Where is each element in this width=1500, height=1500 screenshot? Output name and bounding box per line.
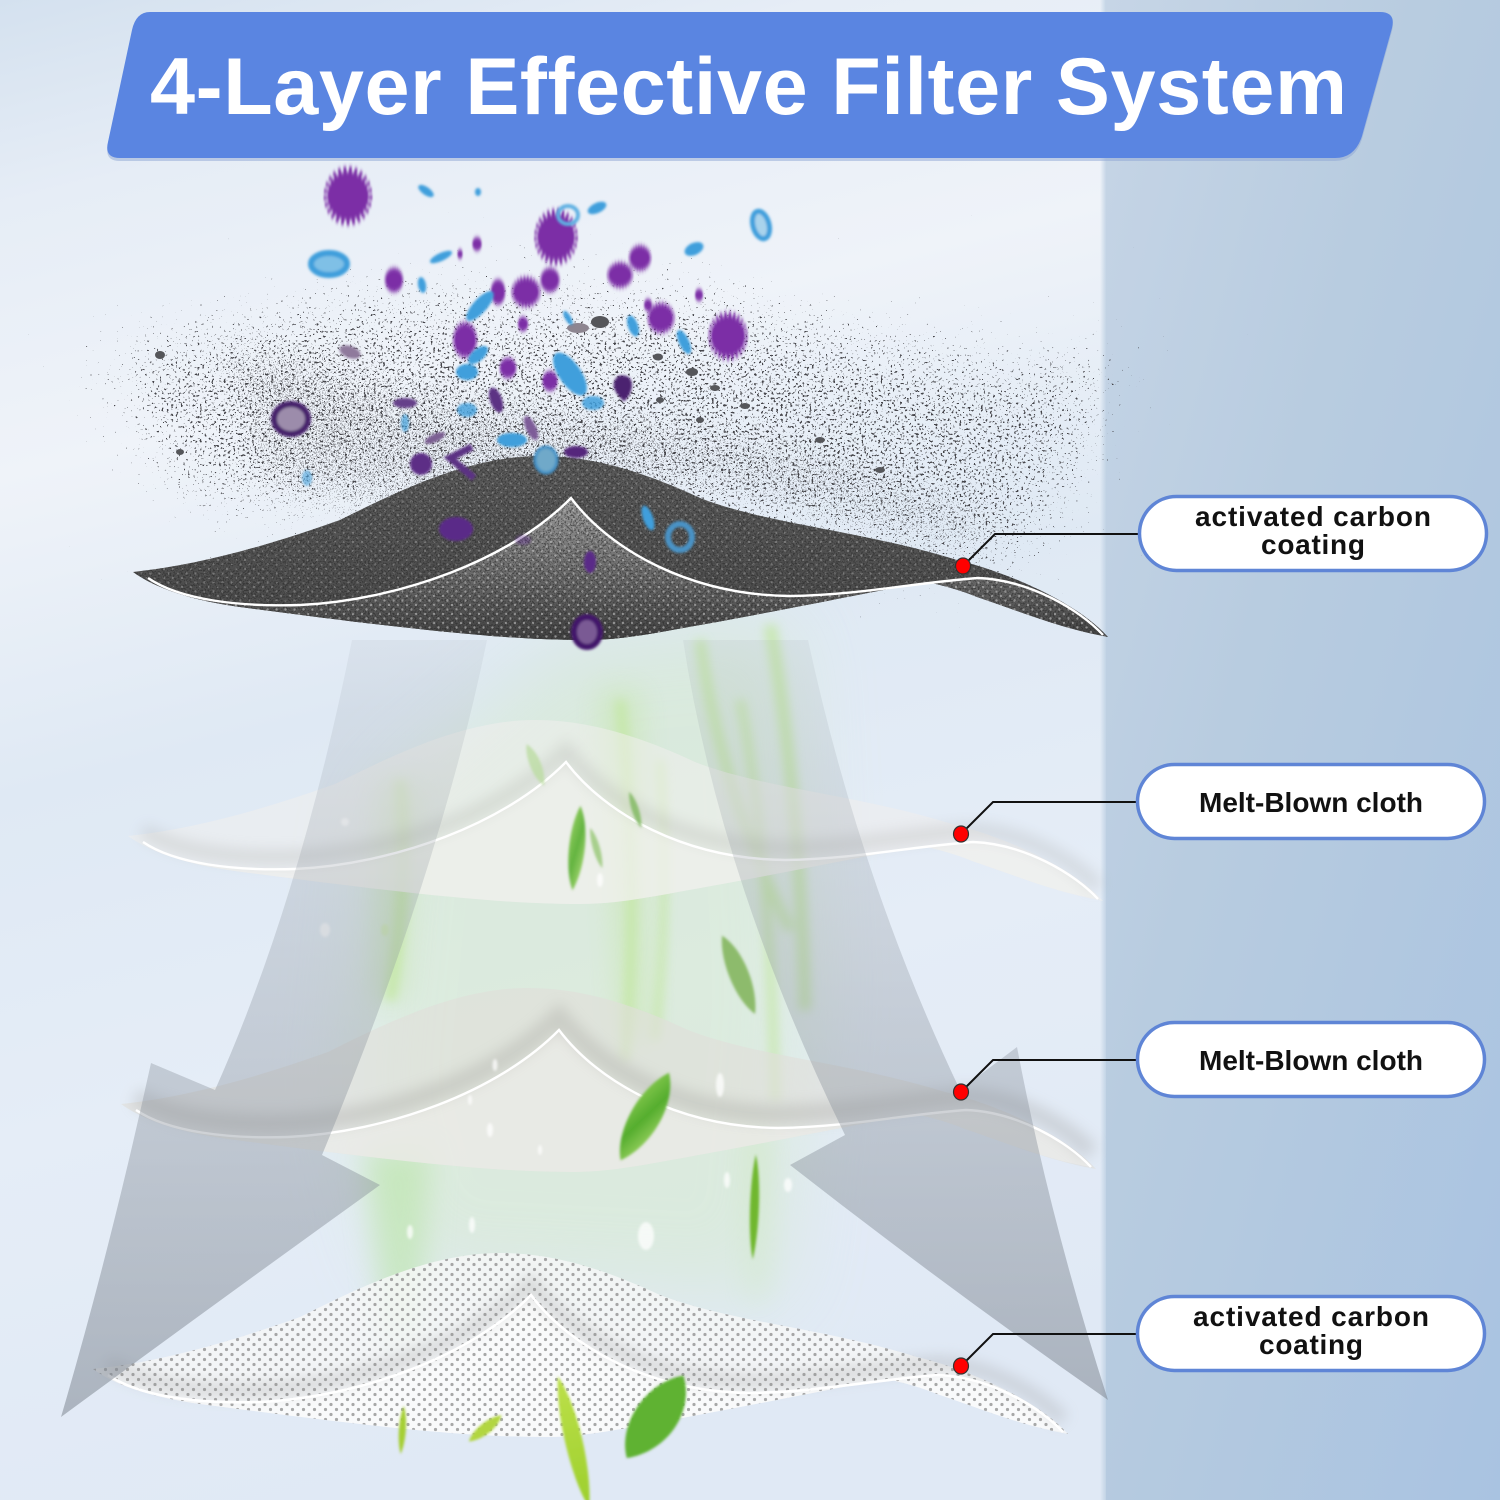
- callout: layer 2 melt-blown cloth: Melt-Blown cloth: [1199, 787, 1423, 818]
- dust cloud: [70, 280, 1150, 590]
- gray dust chunks: [155, 316, 885, 473]
- title banner: [107, 12, 1393, 161]
- background: darker blue right panel: [1100, 0, 1500, 1500]
- title text: 4-Layer Effective Filter System: [150, 42, 1347, 132]
- callout: layer 1 activated carbon coating: [956, 496, 1486, 574]
- dark purple particles: [274, 343, 630, 647]
- callout: layer 1 activated carbon coating: activated carbon: [1195, 501, 1431, 532]
- callout: layer 4 activated carbon coating: activated carbon: [1193, 1301, 1429, 1332]
- callout: layer 4 activated carbon coating: coating: [1259, 1329, 1363, 1360]
- purple virus particles: [328, 172, 744, 390]
- callout: layer 3 melt-blown cloth: [954, 1022, 1484, 1100]
- green airflow glow: [350, 620, 810, 1340]
- callout: layer 3 melt-blown cloth: Melt-Blown cloth: [1199, 1045, 1423, 1076]
- green leaves: [397, 742, 764, 1500]
- blue germ particles: [302, 183, 772, 550]
- callout: layer 1 activated carbon coating: coating: [1261, 529, 1365, 560]
- callout: layer 4 activated carbon coating: [954, 1296, 1484, 1374]
- funnel: left airflow sheet: [61, 640, 487, 1417]
- layer 2: melt-blown cloth: [128, 720, 1103, 904]
- layer 3: melt-blown cloth: [121, 988, 1096, 1172]
- callout: layer 2 melt-blown cloth: [954, 764, 1484, 842]
- funnel: right airflow sheet: [683, 640, 1108, 1400]
- layer 4: activated carbon coating: [93, 1253, 1068, 1437]
- layer 1: activated carbon coating: [130, 450, 1110, 645]
- water droplets in airflow: [320, 818, 792, 1250]
